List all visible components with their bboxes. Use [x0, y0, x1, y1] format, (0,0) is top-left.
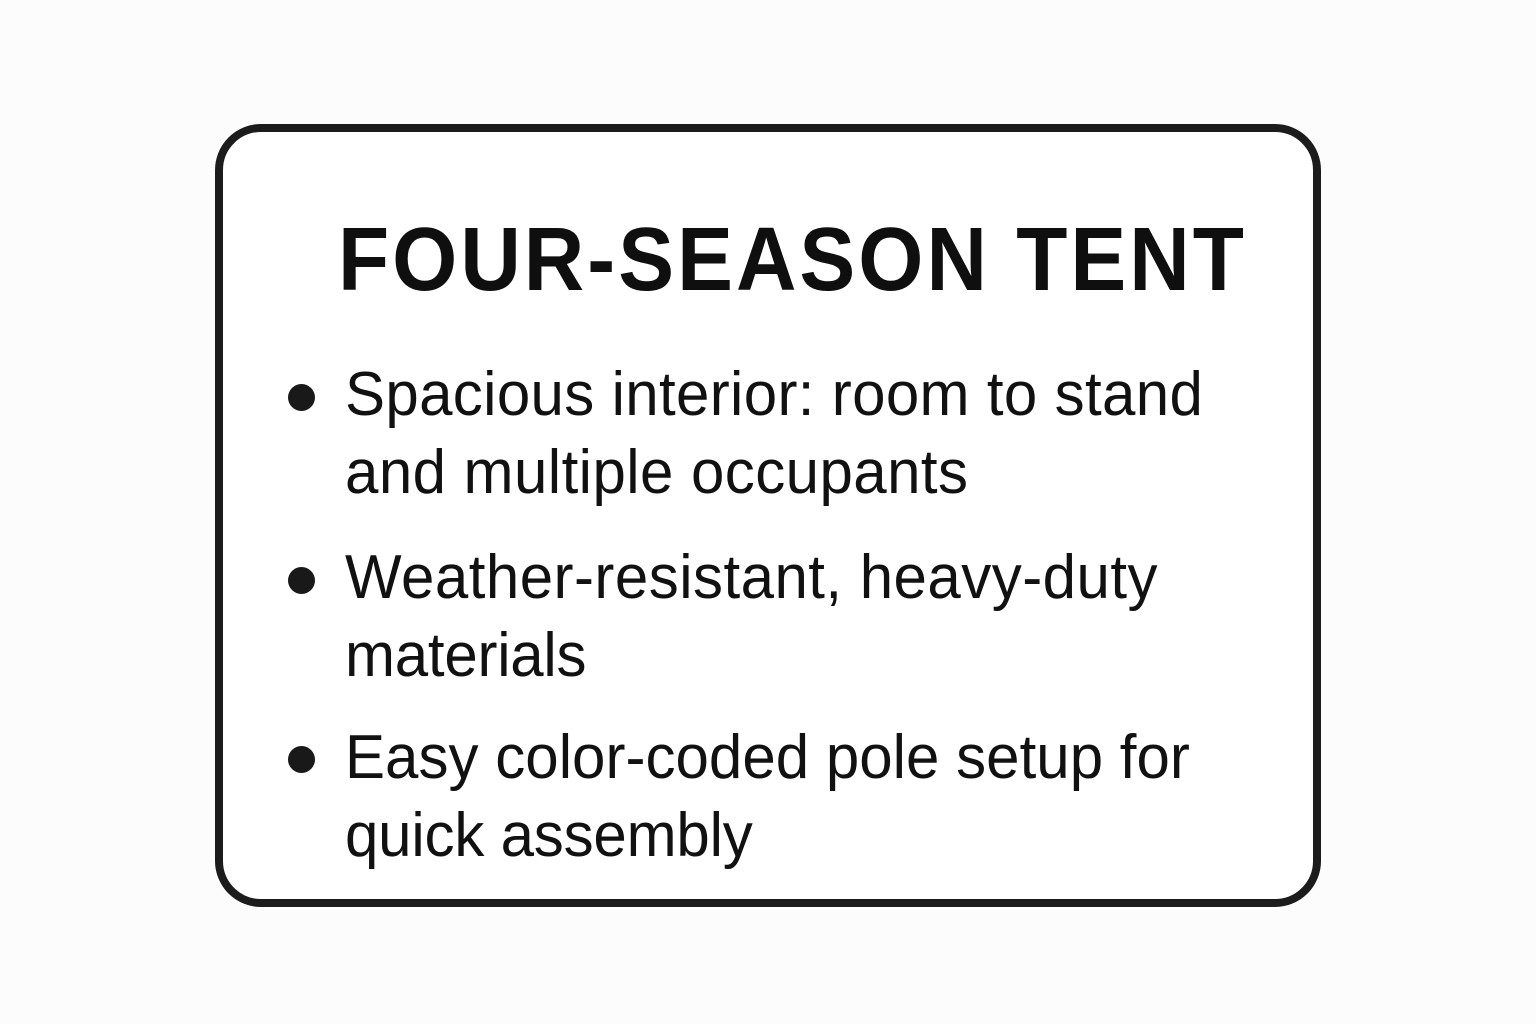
title: FOUR-SEASON TENT	[338, 210, 1247, 310]
panel: four-season tent card	[215, 124, 1321, 907]
text block: weather-resistant materials: Weather-resistant, heavy-duty	[345, 543, 1158, 612]
bullet icon 1	[288, 384, 315, 411]
text block: spacious interior	[345, 360, 1203, 507]
text block: spacious interior: and multiple occupants	[345, 438, 968, 507]
text block: weather-resistant materials: materials	[345, 621, 586, 690]
text block: easy pole setup: quick assembly	[345, 800, 753, 870]
bullet icon 2	[288, 567, 315, 594]
text block: weather-resistant materials	[345, 543, 1158, 690]
bullet icon 3	[288, 746, 315, 773]
text block: easy pole setup	[345, 722, 1190, 870]
text block: easy pole setup: Easy color-coded pole setup for	[345, 722, 1190, 792]
text block: spacious interior: Spacious interior: room to stand	[345, 360, 1203, 429]
